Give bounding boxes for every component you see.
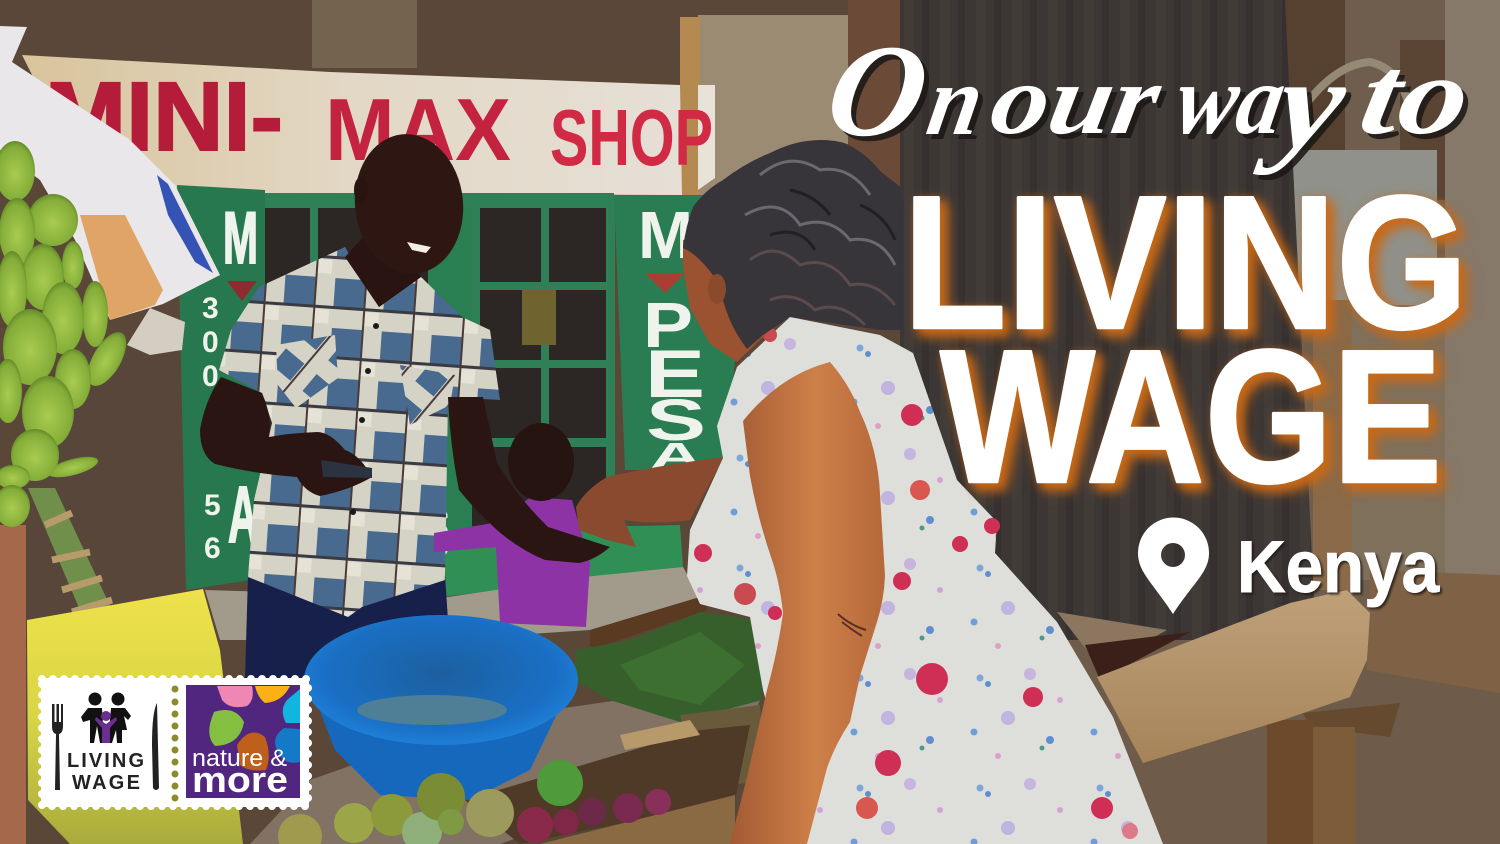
panel left: digits 300: 0 (202, 360, 219, 393)
woman: face (683, 220, 770, 362)
green M-PESA panel right: S (646, 388, 706, 453)
fruit pile (278, 760, 671, 844)
woman: extended arm and hand (576, 457, 724, 547)
background: ground (1050, 640, 1500, 844)
title: On our way to (817, 17, 1479, 176)
green kiosk window (205, 193, 708, 650)
man: buttons (350, 323, 379, 515)
green M-PESA panel right: A (650, 435, 702, 476)
icon: location pin (1138, 518, 1209, 614)
green M-PESA panel right: E (645, 336, 705, 412)
green M-PESA panel right: M (638, 198, 693, 273)
logo text: LIVING: LIVING (67, 750, 144, 772)
green M-PESA panel right: P (643, 289, 693, 361)
title word: our: our (983, 44, 1170, 155)
logo: Living Wage fork (52, 704, 63, 790)
background: corrugated iron sheet (900, 0, 1316, 640)
logo text: WAGE: WAGE (72, 772, 140, 794)
shop sign text: MINI-: MINI- (45, 62, 283, 171)
window: light gap behind bars (522, 290, 556, 345)
logo stamp (41, 678, 309, 807)
woman (576, 140, 1163, 844)
man: ear (354, 177, 368, 203)
logo: Living Wage family (81, 692, 131, 743)
man: phone (321, 460, 372, 478)
logo: Living Wage knife (152, 703, 159, 790)
logo: colour blobs (209, 686, 300, 770)
panel left: red heart mark (227, 281, 257, 301)
shop sign (22, 55, 715, 195)
woman: ear (708, 274, 726, 304)
background: stone wall and post (680, 0, 908, 197)
wooden bench (1057, 570, 1500, 844)
woman: hair curls (745, 161, 895, 325)
woman: elbow crease (838, 614, 866, 636)
background: shop wall (0, 0, 900, 844)
stamp centre perforation (172, 686, 178, 802)
plastic bag (0, 26, 220, 355)
panel left: digits 300 (202, 292, 219, 393)
title word: wa: wa (1168, 44, 1294, 155)
man: left arm and hand (200, 377, 372, 496)
man: neck (345, 235, 421, 307)
window panel text: 193 (420, 507, 453, 557)
man (200, 129, 500, 680)
bananas (0, 141, 134, 622)
shop sign text: SHOP: SHOP (550, 93, 713, 182)
panel left: digits 56: 5 (204, 489, 221, 522)
man: right arm and hand (448, 397, 610, 563)
logo: Nature & More purple square (186, 685, 300, 798)
title letter: n: n (920, 45, 992, 156)
title letter: O: O (817, 17, 939, 164)
panel left: digits 300: 3 (202, 292, 219, 325)
stamp perforated edge (42, 679, 308, 806)
green M-PESA panel left (177, 185, 265, 590)
vegetables on table (250, 612, 765, 844)
woman: bare arm (730, 362, 885, 844)
green M-PESA panel left: M (223, 198, 258, 279)
man: smile (407, 242, 431, 253)
man: shirt pocket left (276, 335, 338, 408)
man: trousers (245, 575, 448, 680)
man: shirt pocket right (400, 365, 455, 425)
location label: Kenya: Kenya (1237, 527, 1440, 608)
panel left: digits 56 (204, 489, 221, 565)
panel left: letter A: A (228, 470, 258, 559)
yellow bucket (27, 589, 243, 844)
logo text: nature &: nature & (192, 745, 287, 772)
title word: to: to (1352, 34, 1479, 158)
woman: dress flowers (694, 328, 1138, 839)
title letter: y: y (1252, 32, 1357, 176)
man: shirt (219, 247, 500, 617)
child: head (508, 423, 574, 501)
woman: hair (683, 140, 903, 349)
panel left: digits 300: 0 (202, 326, 219, 359)
panel right: red heart mark (645, 273, 685, 293)
banana stem rings (45, 513, 112, 612)
green M-PESA panel right (614, 195, 735, 476)
logo text: more: more (192, 759, 288, 800)
panel left: digits 56: 6 (204, 532, 221, 565)
banana stem (28, 488, 112, 622)
shop sign text: MAX: MAX (325, 80, 511, 179)
woman: dress (687, 317, 1163, 844)
background: right shed wall (1270, 0, 1500, 640)
blue basin (304, 615, 578, 800)
child (434, 423, 590, 627)
child: purple top (434, 497, 590, 627)
man: head (348, 129, 470, 279)
